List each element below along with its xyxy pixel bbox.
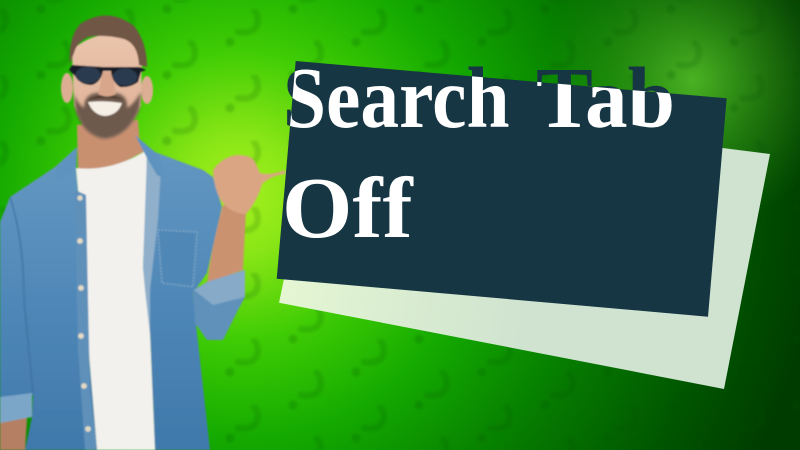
sunglasses: [69, 65, 146, 87]
neck: [77, 120, 147, 170]
title: Off: [282, 161, 414, 257]
person pointing with thumb: [0, 15, 285, 450]
left placket: [75, 190, 97, 450]
left sleeve cuff: [0, 393, 32, 423]
right collar: [135, 135, 168, 180]
white t-shirt: [76, 150, 155, 450]
left forearm skin: [0, 418, 27, 450]
moustache: [87, 95, 124, 100]
smile: [88, 101, 122, 116]
title: [286, 66, 672, 238]
left collar: [56, 147, 77, 182]
right placket: [143, 155, 161, 333]
sleeve fold: [194, 270, 245, 305]
panel: dark title card: [277, 61, 727, 317]
denim shirt: [0, 147, 97, 450]
nose: [98, 72, 116, 96]
shirt buttons: [77, 195, 91, 432]
denim shirt right side: [135, 135, 222, 450]
ears: [61, 73, 73, 103]
face: [72, 35, 142, 139]
title: Tab: [536, 49, 675, 146]
beard: [74, 92, 141, 139]
raised forearm: [207, 205, 246, 283]
fist: [213, 155, 285, 214]
chest pocket: [158, 230, 197, 287]
title: Search: [283, 50, 510, 146]
panel: light back card: [279, 97, 770, 389]
rolled sleeve: [193, 270, 245, 340]
title: Search: [283, 50, 510, 146]
hair: [70, 15, 147, 67]
left sleeve seam: [10, 197, 33, 393]
title: Tab: [536, 49, 675, 146]
